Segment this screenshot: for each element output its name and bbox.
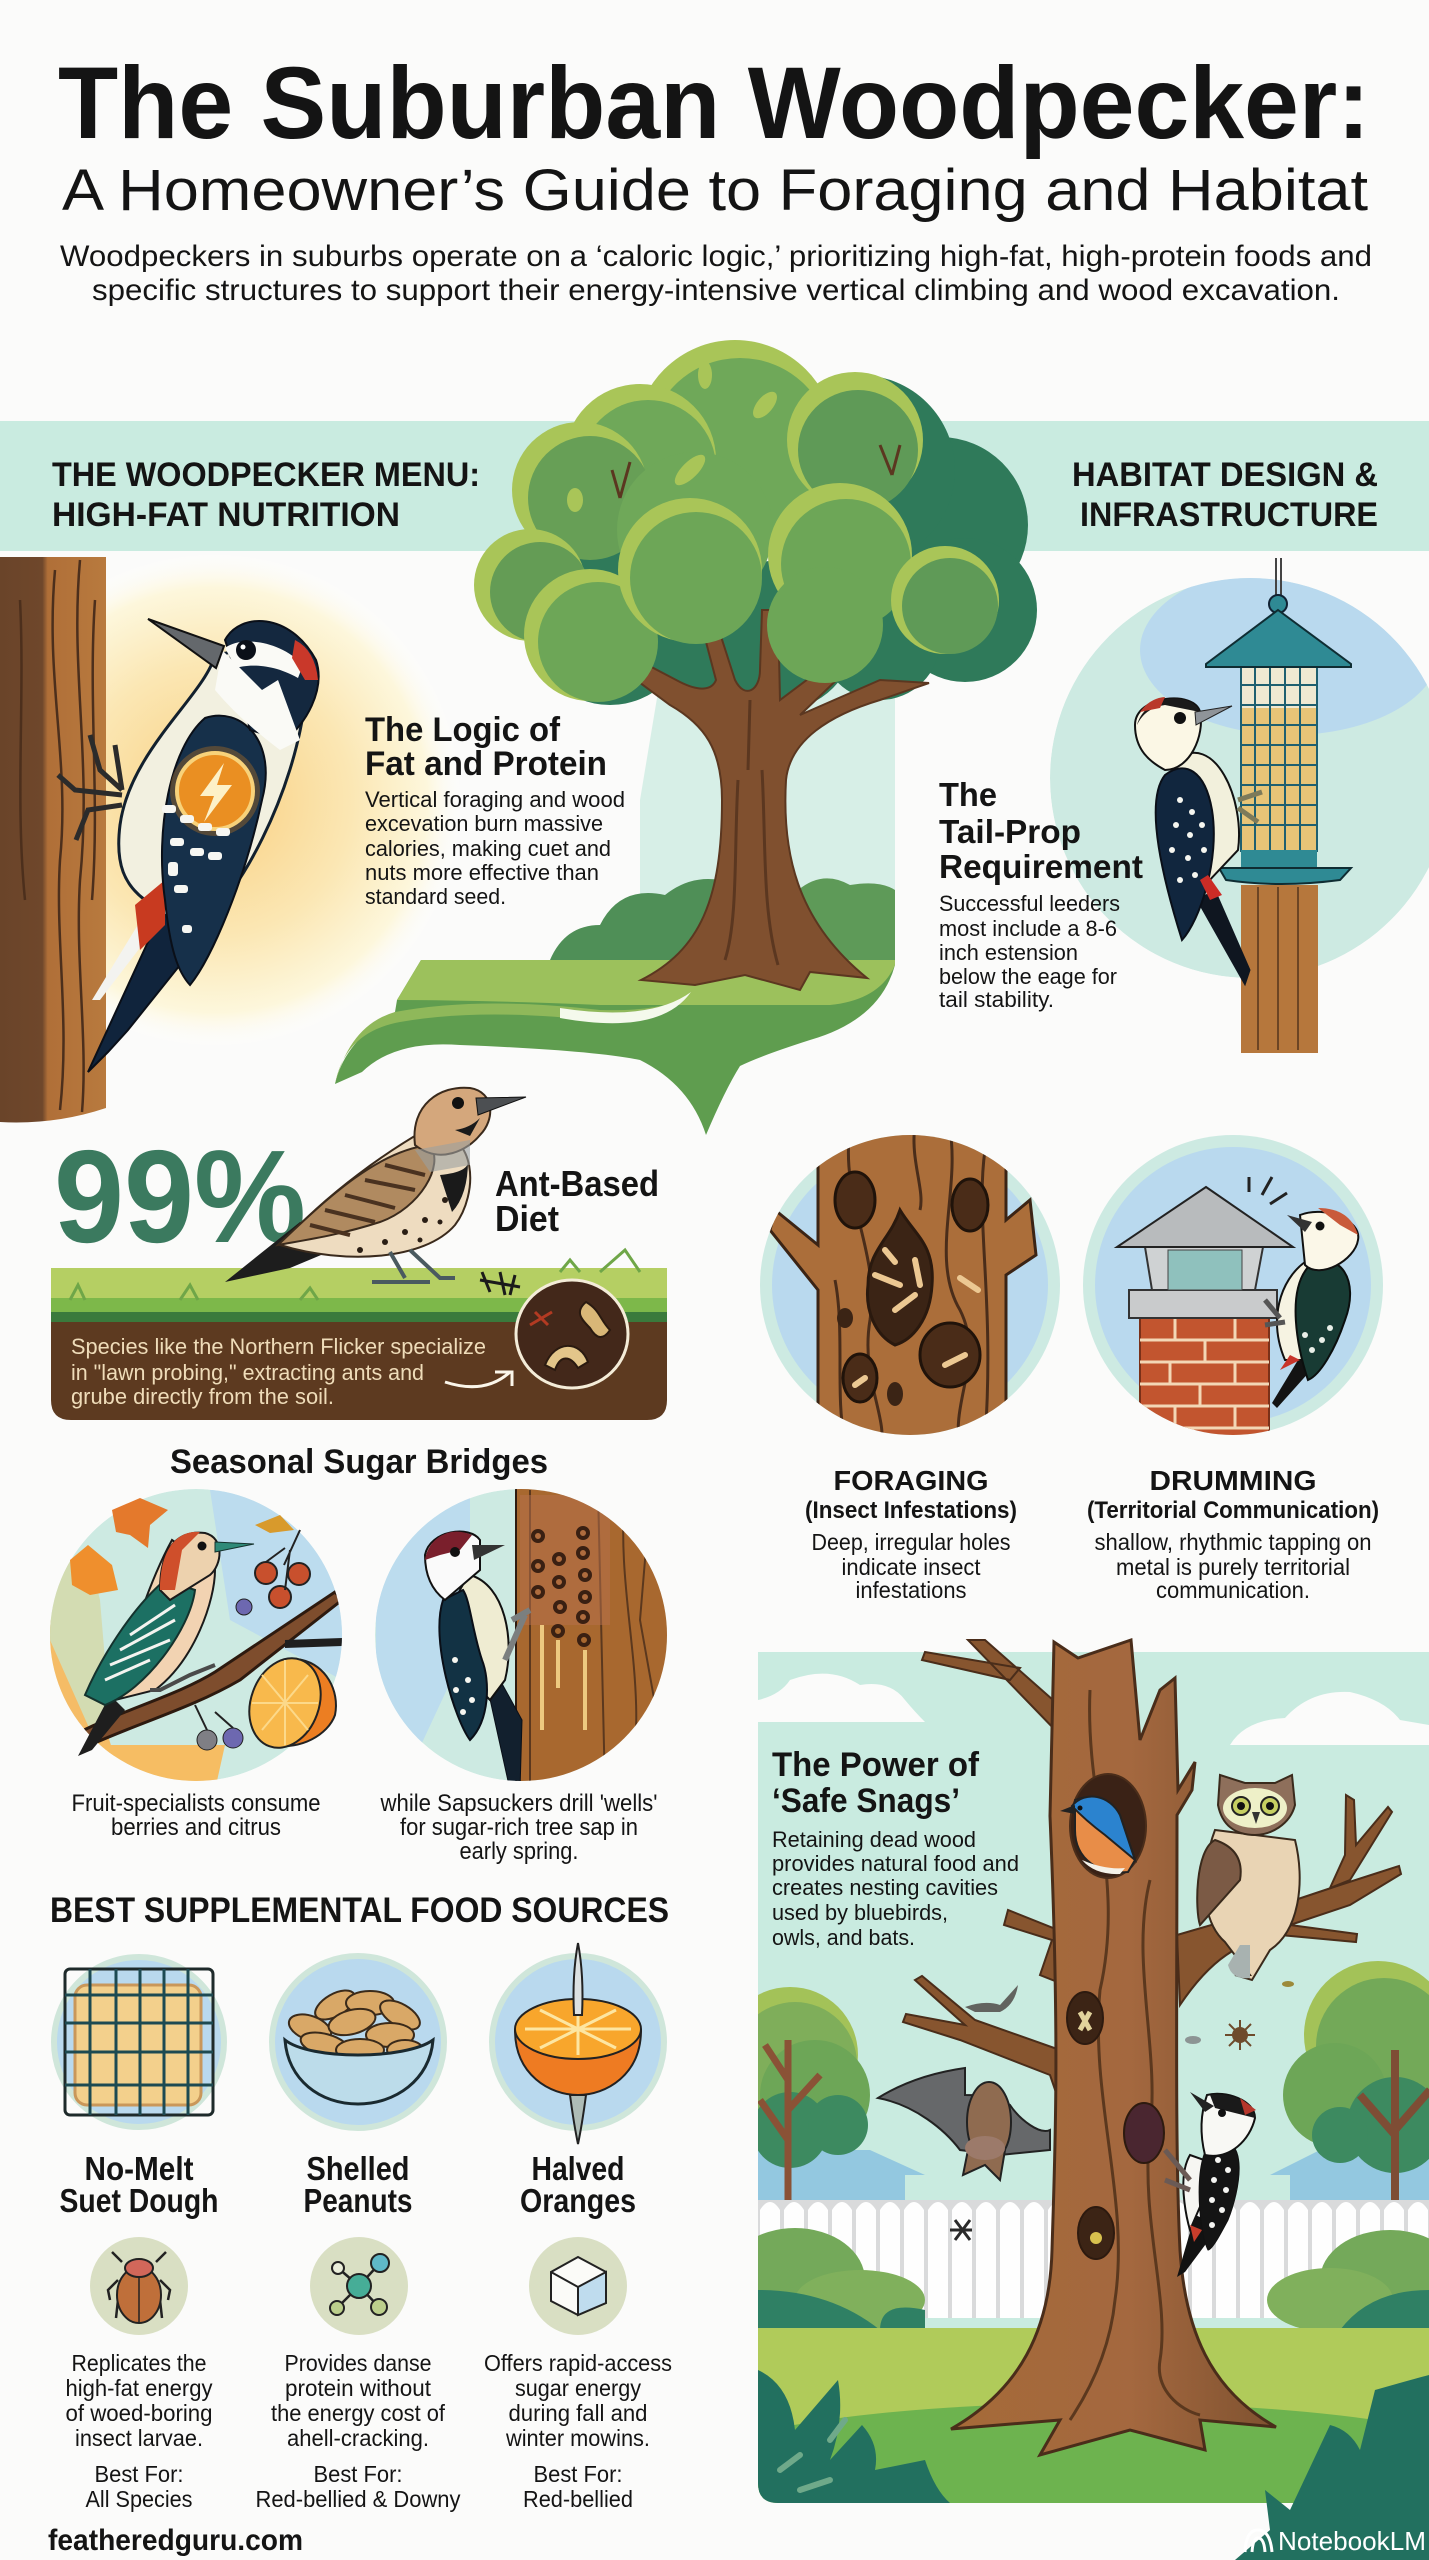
text: fruit specialists: berries and citrus <box>111 1814 281 1841</box>
text: logic of fat and protein: Fat and Protein <box>365 745 607 783</box>
energy core icon <box>170 746 260 836</box>
text: safe snags: creates nesting cavities <box>772 1875 998 1900</box>
arrow to soil inset <box>445 1372 512 1387</box>
panel: foraging <box>760 1120 1060 1603</box>
text: tail-prop requirement: The <box>939 776 997 813</box>
text: orange description: Offers rapid-access <box>484 2350 672 2376</box>
central oak tree illustration <box>335 340 1037 1135</box>
soil text: Species like the Northern Flicker specialize <box>71 1334 486 1359</box>
canopy highlights <box>567 361 781 512</box>
panel: drumming <box>1083 1135 1383 1603</box>
sap drips <box>542 1625 585 1730</box>
right tree <box>1283 1961 1429 2205</box>
text: fruit specialists: Fruit-specialists consume <box>72 1790 320 1817</box>
text: peanut description: Red-bellied & Downy <box>256 2486 461 2512</box>
text: tail-prop requirement: inch estension <box>939 940 1078 965</box>
text: suet description: All Species <box>86 2486 192 2512</box>
hanging bat <box>878 2068 1050 2180</box>
text: logic of fat and protein: excevation burn massive <box>365 811 603 836</box>
stat: 99 percent: 99% <box>54 1123 306 1270</box>
text: peanut description: protein without <box>285 2375 432 2401</box>
drumming circle: chimney cap <box>1083 1135 1383 1443</box>
text: safe snags: used by bluebirds, <box>772 1900 948 1925</box>
foreground leaves right <box>1235 2375 1429 2560</box>
label: no-melt suet dough: No-Melt <box>84 2150 194 2187</box>
label: ant-based diet: Diet <box>495 1198 559 1239</box>
panel: tail-prop feeder <box>939 558 1429 1053</box>
foraging text: (Insect Infestations) <box>805 1497 1017 1524</box>
sky circle <box>1050 565 1429 978</box>
red-bellied bird <box>78 1532 254 1756</box>
sap tree <box>515 1489 667 1781</box>
branch <box>84 1590 339 1744</box>
text: safe snags: The Power of <box>772 1746 980 1784</box>
heading: habitat design <box>1072 456 1378 534</box>
trunk and limbs <box>593 596 929 990</box>
label: shelled peanuts: Peanuts <box>304 2182 412 2219</box>
icon: protein molecule <box>310 2237 408 2335</box>
panel: best supplemental food sources <box>50 1891 672 2512</box>
text: tail-prop requirement: Requirement <box>939 848 1143 885</box>
lawn and soil cross-section <box>51 1250 667 1420</box>
text: orange description: Red-bellied <box>523 2486 633 2512</box>
drumming text: communication. <box>1156 1577 1310 1603</box>
snag tree <box>903 1640 1401 2455</box>
wing spots <box>162 805 230 933</box>
drumming text: DRUMMING <box>1150 1465 1316 1496</box>
white swoosh <box>560 992 691 1023</box>
sapsucker bird <box>425 1532 530 1790</box>
heading: seasonal sugar bridges: Seasonal Sugar Bridges <box>170 1443 548 1481</box>
label: halved oranges <box>520 2150 636 2219</box>
drumming text: metal is purely territorial <box>1116 1554 1350 1580</box>
ant <box>480 1272 520 1295</box>
snag branches <box>903 1640 1070 2110</box>
text: tail-prop requirement: below the eage for <box>939 964 1117 989</box>
foraging text: Deep, irregular holes <box>812 1529 1010 1555</box>
text: tail-prop requirement <box>939 776 1143 1012</box>
text: peanut description <box>256 2350 461 2512</box>
snag woodpecker <box>1165 2092 1256 2277</box>
label: shelled peanuts <box>304 2150 412 2219</box>
label: no-melt suet dough <box>60 2150 218 2219</box>
upper canopy blobs <box>474 340 999 702</box>
text: orange description: sugar energy <box>515 2375 641 2401</box>
text: suet description: of woed-boring <box>66 2400 212 2426</box>
lawn <box>758 2328 1429 2503</box>
foraging circle: infested trunk <box>760 1120 1060 1450</box>
intro paragraph: specific structures to support their energy-intensive vertical climbing and wood excavation. <box>92 274 1340 307</box>
heading: woodpecker menu: THE WOODPECKER MENU: <box>52 456 480 494</box>
head <box>225 621 319 740</box>
soil inset: grubs <box>516 1280 628 1388</box>
energy glow <box>0 550 465 1050</box>
woodpecker with energy core <box>58 619 319 1072</box>
backyard scene <box>758 1652 1429 2503</box>
foraging text: FORAGING <box>834 1465 988 1496</box>
heading: woodpecker menu <box>52 456 480 534</box>
text: tail-prop requirement: most include a 8-6 <box>939 916 1117 941</box>
heading: woodpecker menu: HIGH-FAT NUTRITION <box>52 496 400 534</box>
flying bat and insects <box>950 1981 1294 2240</box>
heading: habitat design: INFRASTRUCTURE <box>1080 496 1378 534</box>
panel: ant-based diet <box>51 1088 667 1420</box>
soil text: in "lawn probing," extracting ants and <box>71 1360 424 1385</box>
text: logic of fat and protein: nuts more effective than <box>365 860 599 885</box>
text: orange description: Best For: <box>534 2461 622 2487</box>
text: logic of fat and protein: standard seed. <box>365 884 506 909</box>
text: orange description <box>484 2350 672 2512</box>
text: suet description: Best For: <box>94 2461 184 2487</box>
claws <box>58 735 122 840</box>
tree trunk <box>0 557 106 1122</box>
panel: logic of fat and protein <box>0 550 625 1122</box>
soil text <box>71 1334 486 1409</box>
mint backdrop <box>640 680 895 965</box>
text: safe snags <box>772 1746 1019 1950</box>
sound lines <box>1249 1177 1287 1204</box>
bluebird <box>1060 1796 1135 1874</box>
drumming text: shallow, rhythmic tapping on <box>1094 1529 1372 1555</box>
panel: sapsuckers <box>375 1480 676 1865</box>
intro paragraph: Woodpeckers in suburbs operate on a ‘caloric logic,’ prioritizing high-fat, high-protein foods and <box>60 240 1372 273</box>
text: peanut description: the energy cost of <box>271 2400 446 2426</box>
text: orange description: winter mowins. <box>505 2425 650 2451</box>
text: safe snags: ‘Safe Snags’ <box>772 1782 960 1820</box>
text: peanut description: Provides danse <box>284 2350 432 2376</box>
cavities <box>1070 1774 1146 1878</box>
text: orange description: during fall and <box>508 2400 648 2426</box>
foraging text <box>805 1465 1017 1603</box>
clouds <box>758 1674 1429 1745</box>
back canopy <box>530 375 1037 710</box>
text: logic of fat and protein: The Logic of <box>365 711 561 749</box>
sap wells <box>533 1528 590 1645</box>
text: logic of fat and protein: Vertical foraging and wood <box>365 787 625 812</box>
snag trunk <box>951 1640 1276 2455</box>
drumming text: (Territorial Communication) <box>1087 1497 1379 1524</box>
text: fruit specialists <box>72 1790 320 1841</box>
footer: notebooklm badge: NotebookLM <box>1278 2526 1426 2556</box>
foreground leaves left <box>758 2370 950 2503</box>
label: ant-based diet <box>495 1163 659 1239</box>
text: sapsuckers: early spring. <box>460 1838 578 1865</box>
drumming text <box>1087 1465 1379 1603</box>
text: sapsuckers: while Sapsuckers drill 'wells' <box>380 1790 658 1817</box>
icon: halved orange on skewer <box>492 1943 664 2144</box>
text: suet description: insect larvae. <box>75 2425 203 2451</box>
label: ant-based diet: Ant-Based <box>495 1163 659 1204</box>
drumming woodpecker <box>1265 1208 1358 1408</box>
text: peanut description: Best For: <box>314 2461 402 2487</box>
canopy twigs <box>612 445 900 498</box>
subtitle: A Homeowner’s Guide to Foraging and Habitat <box>62 158 1368 223</box>
circle: sapsucker wells <box>375 1480 676 1790</box>
panel: safe snags <box>700 1640 1429 2560</box>
intro paragraph <box>60 240 1372 307</box>
text: tail-prop requirement: Tail-Prop <box>939 813 1081 850</box>
foraging text: infestations <box>856 1577 966 1603</box>
text: tail-prop requirement: tail stability. <box>939 987 1054 1012</box>
autumn leaves <box>112 1498 168 1548</box>
text: suet description: Replicates the <box>72 2350 206 2376</box>
icon: beetle <box>90 2237 188 2335</box>
column: suet dough <box>54 1957 224 2512</box>
text: safe snags: provides natural food and <box>772 1851 1019 1876</box>
column: shelled peanuts <box>256 1956 461 2512</box>
text: tail-prop requirement: Successful leeders <box>939 891 1120 916</box>
label: halved oranges: Oranges <box>520 2182 636 2219</box>
heading: best supplemental: BEST SUPPLEMENTAL FOOD SOURCES <box>50 1891 669 1930</box>
left tree <box>758 1987 870 2200</box>
label: no-melt suet dough: Suet Dough <box>60 2182 218 2219</box>
text: logic of fat and protein: calories, making cuet and <box>365 836 611 861</box>
icon: peanut bowl <box>272 1956 444 2128</box>
owl <box>1197 1775 1300 1980</box>
picket fence <box>758 2200 1429 2318</box>
hedges <box>725 2228 1429 2332</box>
text: logic of fat and protein <box>365 711 625 909</box>
label: halved oranges: Halved <box>532 2150 624 2187</box>
beak <box>148 619 224 668</box>
fruit <box>255 1562 277 1584</box>
circle: red-bellied woodpecker with fruit <box>45 1489 342 1790</box>
footer: website: featheredguru.com <box>48 2524 303 2557</box>
main title: The Suburban Woodpecker: <box>58 46 1370 160</box>
panel: fruit specialists <box>45 1489 342 1841</box>
section band <box>0 421 1429 551</box>
label: shelled peanuts: Shelled <box>306 2150 410 2187</box>
text: suet description: high-fat energy <box>66 2375 213 2401</box>
column: halved oranges <box>484 1943 672 2512</box>
text: safe snags: owls, and bats. <box>772 1925 915 1950</box>
icon: suet cage <box>54 1957 224 2127</box>
soil text: grube directly from the soil. <box>71 1384 334 1409</box>
distant houses <box>758 2145 1429 2200</box>
background shrubs <box>550 878 895 965</box>
foraging text: indicate insect <box>842 1554 981 1580</box>
heading: habitat design: HABITAT DESIGN & <box>1072 456 1378 494</box>
text: sapsuckers <box>380 1790 658 1865</box>
downy woodpecker on feeder <box>1135 697 1262 985</box>
text: suet description <box>66 2350 213 2512</box>
green ground and arrow <box>335 960 895 1135</box>
northern flicker <box>225 1088 526 1282</box>
text: safe snags: Retaining dead wood <box>772 1827 976 1852</box>
text: peanut description: ahell-cracking. <box>287 2425 429 2451</box>
text: sapsuckers: for sugar-rich tree sap in <box>400 1814 638 1841</box>
hanging feeder <box>1206 558 1351 1053</box>
icon: sugar cube <box>529 2237 627 2335</box>
title block <box>58 46 1372 307</box>
